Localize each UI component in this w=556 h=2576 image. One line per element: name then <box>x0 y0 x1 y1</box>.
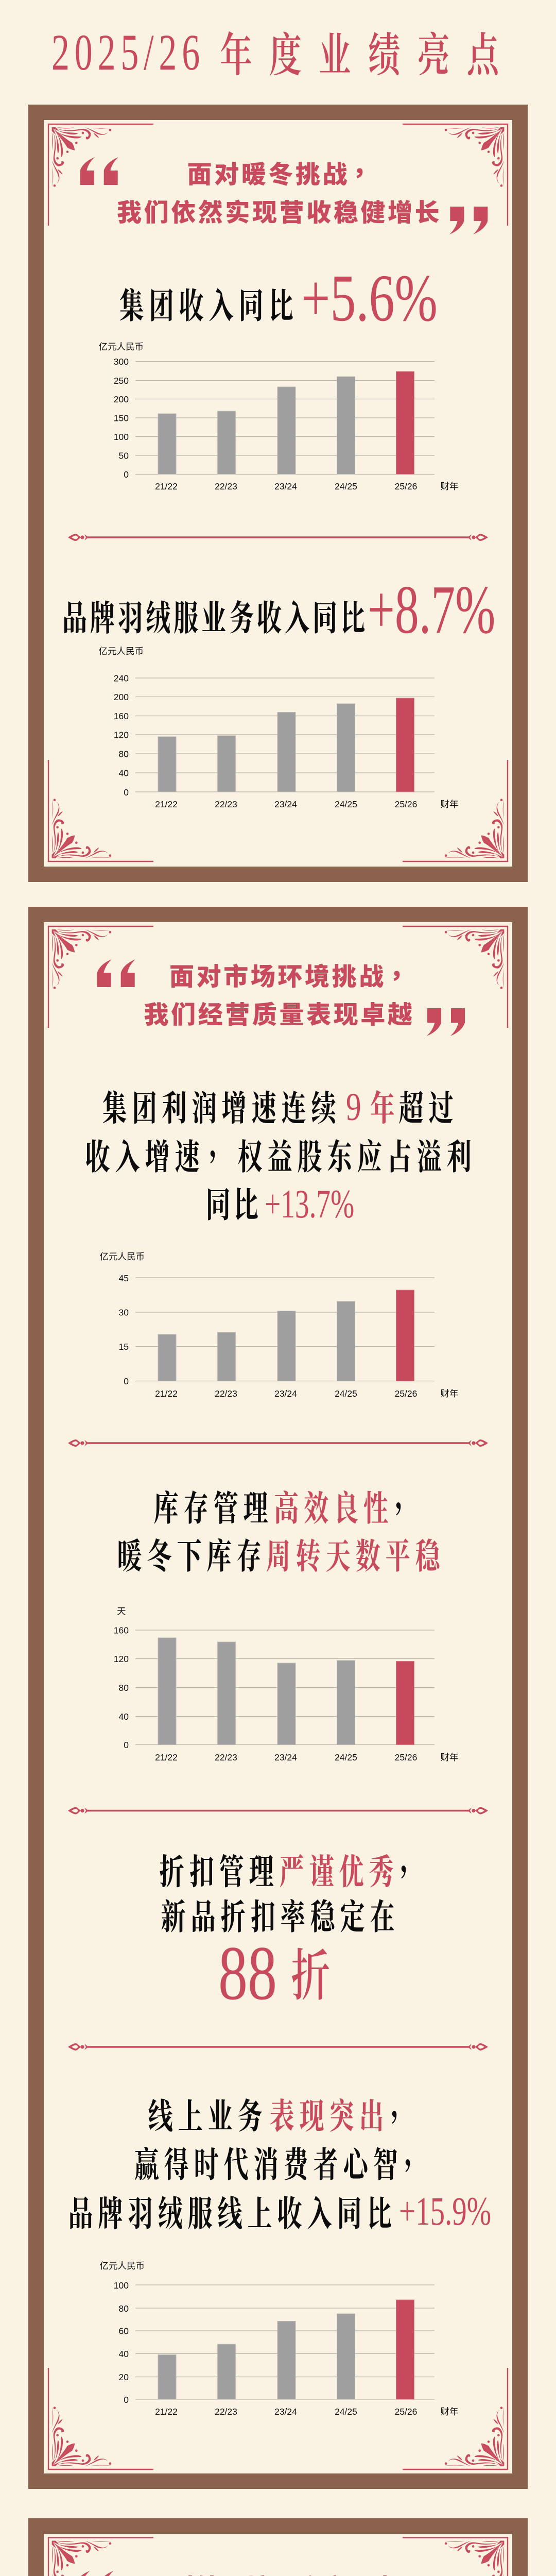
quote callout: 我们依然实现营收稳健增长 <box>117 199 442 227</box>
panel frame <box>28 105 528 882</box>
divider <box>68 1439 488 1447</box>
title <box>51 19 516 85</box>
heading: profit growth <box>85 1080 477 1227</box>
gridlines and y axis labels: 240 <box>114 673 129 683</box>
gridlines and y axis labels: 250 <box>114 376 129 386</box>
gridlines and y axis labels: 40 <box>119 768 129 778</box>
heading: brand down apparel revenue <box>62 572 495 648</box>
x axis labels: 23/24 <box>274 481 297 492</box>
x axis labels: 21/22 <box>155 481 178 492</box>
axis unit: 亿元人民币 <box>100 1251 145 1262</box>
heading: profit growth: 超过 <box>398 1080 459 1131</box>
heading: discount: 新品折扣率稳定在 <box>161 1889 400 1939</box>
heading: online business <box>68 2076 491 2236</box>
panel: shareholder returns <box>28 2518 528 2576</box>
axis unit: 亿元人民币 <box>99 646 144 656</box>
heading: profit growth: +13.7% <box>265 1182 354 1226</box>
x axis labels: 21/22 <box>155 2406 178 2417</box>
x axis labels: 财年 <box>441 799 458 809</box>
quote callout: ， <box>352 152 377 180</box>
x axis labels <box>155 2406 458 2417</box>
x axis labels: 24/25 <box>335 799 357 809</box>
gridlines and y axis labels <box>114 1625 435 1750</box>
heading: profit growth: 9 <box>346 1085 361 1129</box>
bar chart: net profit <box>100 1251 458 1399</box>
x axis labels: 25/26 <box>395 1752 417 1762</box>
gridlines and y axis labels: 120 <box>114 1654 129 1664</box>
x axis labels: 24/25 <box>335 2406 357 2417</box>
heading: profit growth: ， <box>209 1115 234 1166</box>
heading: group revenue <box>119 262 438 335</box>
x axis labels: 24/25 <box>335 481 357 492</box>
gridlines and y axis labels: 80 <box>119 749 129 759</box>
gridlines and y axis labels <box>114 357 435 480</box>
divider <box>68 534 488 541</box>
gridlines and y axis labels: 200 <box>114 692 129 702</box>
x axis labels: 25/26 <box>395 1388 417 1399</box>
heading: discount: 88 <box>218 1930 277 2016</box>
heading: online business: 表现突出 <box>270 2088 389 2139</box>
gridlines and y axis labels: 0 <box>124 1740 129 1750</box>
x axis labels: 22/23 <box>215 799 237 809</box>
x axis labels: 21/22 <box>155 799 178 809</box>
heading: online business: 线上业务 <box>148 2088 268 2139</box>
bars <box>158 1638 414 1744</box>
panel frame <box>28 907 528 2489</box>
heading: discount <box>160 1831 425 2016</box>
x axis labels: 财年 <box>441 481 458 492</box>
heading: inventory: ， <box>395 1467 420 1518</box>
x axis labels: 21/22 <box>155 1752 178 1762</box>
axis unit: 亿元人民币 <box>99 342 144 352</box>
heading: online business: 品牌羽绒服线上收入同比 <box>68 2185 397 2236</box>
divider <box>68 2043 488 2050</box>
bars <box>158 1290 414 1381</box>
quote callout: 我们经营质量表现卓越 <box>144 1002 415 1029</box>
heading: inventory: 库存管理 <box>153 1480 273 1531</box>
gridlines and y axis labels: 0 <box>124 2395 129 2405</box>
gridlines and y axis labels: 0 <box>124 1376 129 1386</box>
quote callout <box>97 955 465 1036</box>
x axis labels: 23/24 <box>274 1388 297 1399</box>
panel: operating quality <box>28 907 528 2489</box>
gridlines and y axis labels <box>114 2280 435 2405</box>
gridlines and y axis labels: 40 <box>119 1711 129 1722</box>
heading: discount: 严谨优秀 <box>279 1844 399 1894</box>
bars <box>158 698 414 792</box>
quote callout <box>80 152 488 234</box>
gridlines and y axis labels: 30 <box>119 1308 129 1318</box>
title: 2025/26 <box>51 24 205 81</box>
divider <box>68 1807 488 1815</box>
x axis labels: 25/26 <box>395 481 417 492</box>
gridlines and y axis labels: 80 <box>119 1683 129 1693</box>
gridlines and y axis labels <box>119 1273 435 1386</box>
gridlines and y axis labels: 40 <box>119 2349 129 2359</box>
gridlines and y axis labels <box>114 673 435 798</box>
bar chart: inventory turnover days <box>114 1606 458 1762</box>
x axis labels: 22/23 <box>215 481 237 492</box>
x axis labels: 23/24 <box>274 2406 297 2417</box>
bars <box>158 371 414 474</box>
gridlines and y axis labels: 80 <box>119 2303 129 2314</box>
gridlines and y axis labels: 0 <box>124 787 129 798</box>
x axis labels <box>155 799 458 809</box>
gridlines and y axis labels: 50 <box>119 450 129 461</box>
x axis labels: 23/24 <box>274 1752 297 1762</box>
x axis labels: 22/23 <box>215 1388 237 1399</box>
gridlines and y axis labels: 160 <box>114 711 129 721</box>
x axis labels: 22/23 <box>215 2406 237 2417</box>
heading: brand down apparel revenue: +8.7% <box>368 572 495 648</box>
gridlines and y axis labels: 160 <box>114 1625 129 1635</box>
heading: profit growth: 同比 <box>206 1177 261 1227</box>
x axis labels: 财年 <box>441 1752 458 1762</box>
x axis labels: 23/24 <box>274 799 297 809</box>
x axis labels <box>155 1388 458 1399</box>
x axis labels: 24/25 <box>335 1752 357 1762</box>
ornament: corner frames <box>48 124 508 861</box>
heading: online business: ， <box>391 2076 415 2126</box>
gridlines and y axis labels: 150 <box>114 413 129 423</box>
panel: revenue growth <box>28 105 528 882</box>
gridlines and y axis labels: 200 <box>114 394 129 404</box>
heading: inventory: 高效良性 <box>274 1480 393 1531</box>
gridlines and y axis labels: 300 <box>114 357 129 367</box>
gridlines and y axis labels: 120 <box>114 730 129 740</box>
quote callout: 面对市场环境挑战 <box>169 963 386 991</box>
heading: profit growth: 权益股东应占溢利 <box>238 1129 477 1179</box>
gridlines and y axis labels: 0 <box>124 469 129 480</box>
heading: inventory <box>117 1467 445 1579</box>
gridlines and y axis labels: 100 <box>114 2280 129 2291</box>
ornament: corner frames <box>48 926 508 2469</box>
x axis labels <box>155 481 458 492</box>
heading: discount: ， <box>400 1831 425 1881</box>
ornament: corner frames <box>48 2538 508 2576</box>
heading: inventory: 暖冬下库存 <box>117 1528 267 1579</box>
heading: discount: 折 <box>291 1931 330 2011</box>
bar chart: brand down apparel revenue <box>99 646 458 809</box>
x axis labels: 财年 <box>441 2406 458 2417</box>
title: 年度业绩亮点 <box>220 19 516 85</box>
heading: online business: ， <box>404 2124 429 2175</box>
heading: profit growth: 年 <box>370 1080 395 1131</box>
x axis labels: 25/26 <box>395 799 417 809</box>
bar chart: online revenue <box>100 2261 458 2417</box>
gridlines and y axis labels: 45 <box>119 1273 129 1283</box>
axis unit: 天 <box>117 1606 126 1617</box>
heading: brand down apparel revenue: 品牌羽绒服业务收入同比 <box>62 590 368 640</box>
bars <box>158 2300 414 2399</box>
heading: discount: 折扣管理 <box>160 1844 279 1894</box>
gridlines and y axis labels: 60 <box>119 2326 129 2336</box>
gridlines and y axis labels: 15 <box>119 1342 129 1352</box>
quote callout: ， <box>389 955 414 982</box>
x axis labels: 22/23 <box>215 1752 237 1762</box>
x axis labels: 24/25 <box>335 1388 357 1399</box>
bar chart: group revenue <box>99 342 458 492</box>
x axis labels: 财年 <box>441 1388 458 1399</box>
quote callout <box>75 2567 502 2576</box>
x axis labels <box>155 1752 458 1762</box>
quote callout: 面对暖冬挑战 <box>187 161 350 189</box>
heading: online business: 赢得时代消费者心智 <box>134 2137 403 2187</box>
heading: profit growth: 收入增速 <box>85 1129 205 1179</box>
heading: online business: +15.9% <box>399 2189 491 2233</box>
x axis labels: 21/22 <box>155 1388 178 1399</box>
x axis labels: 25/26 <box>395 2406 417 2417</box>
heading: group revenue: 集团收入同比 <box>119 278 299 328</box>
axis unit: 亿元人民币 <box>100 2261 145 2271</box>
gridlines and y axis labels: 20 <box>119 2372 129 2382</box>
panel frame <box>28 2518 528 2576</box>
gridlines and y axis labels: 100 <box>114 432 129 442</box>
heading: group revenue: +5.6% <box>301 262 438 335</box>
heading: inventory: 周转天数平稳 <box>266 1528 445 1579</box>
heading: profit growth: 集团利润增速连续 <box>102 1080 341 1131</box>
